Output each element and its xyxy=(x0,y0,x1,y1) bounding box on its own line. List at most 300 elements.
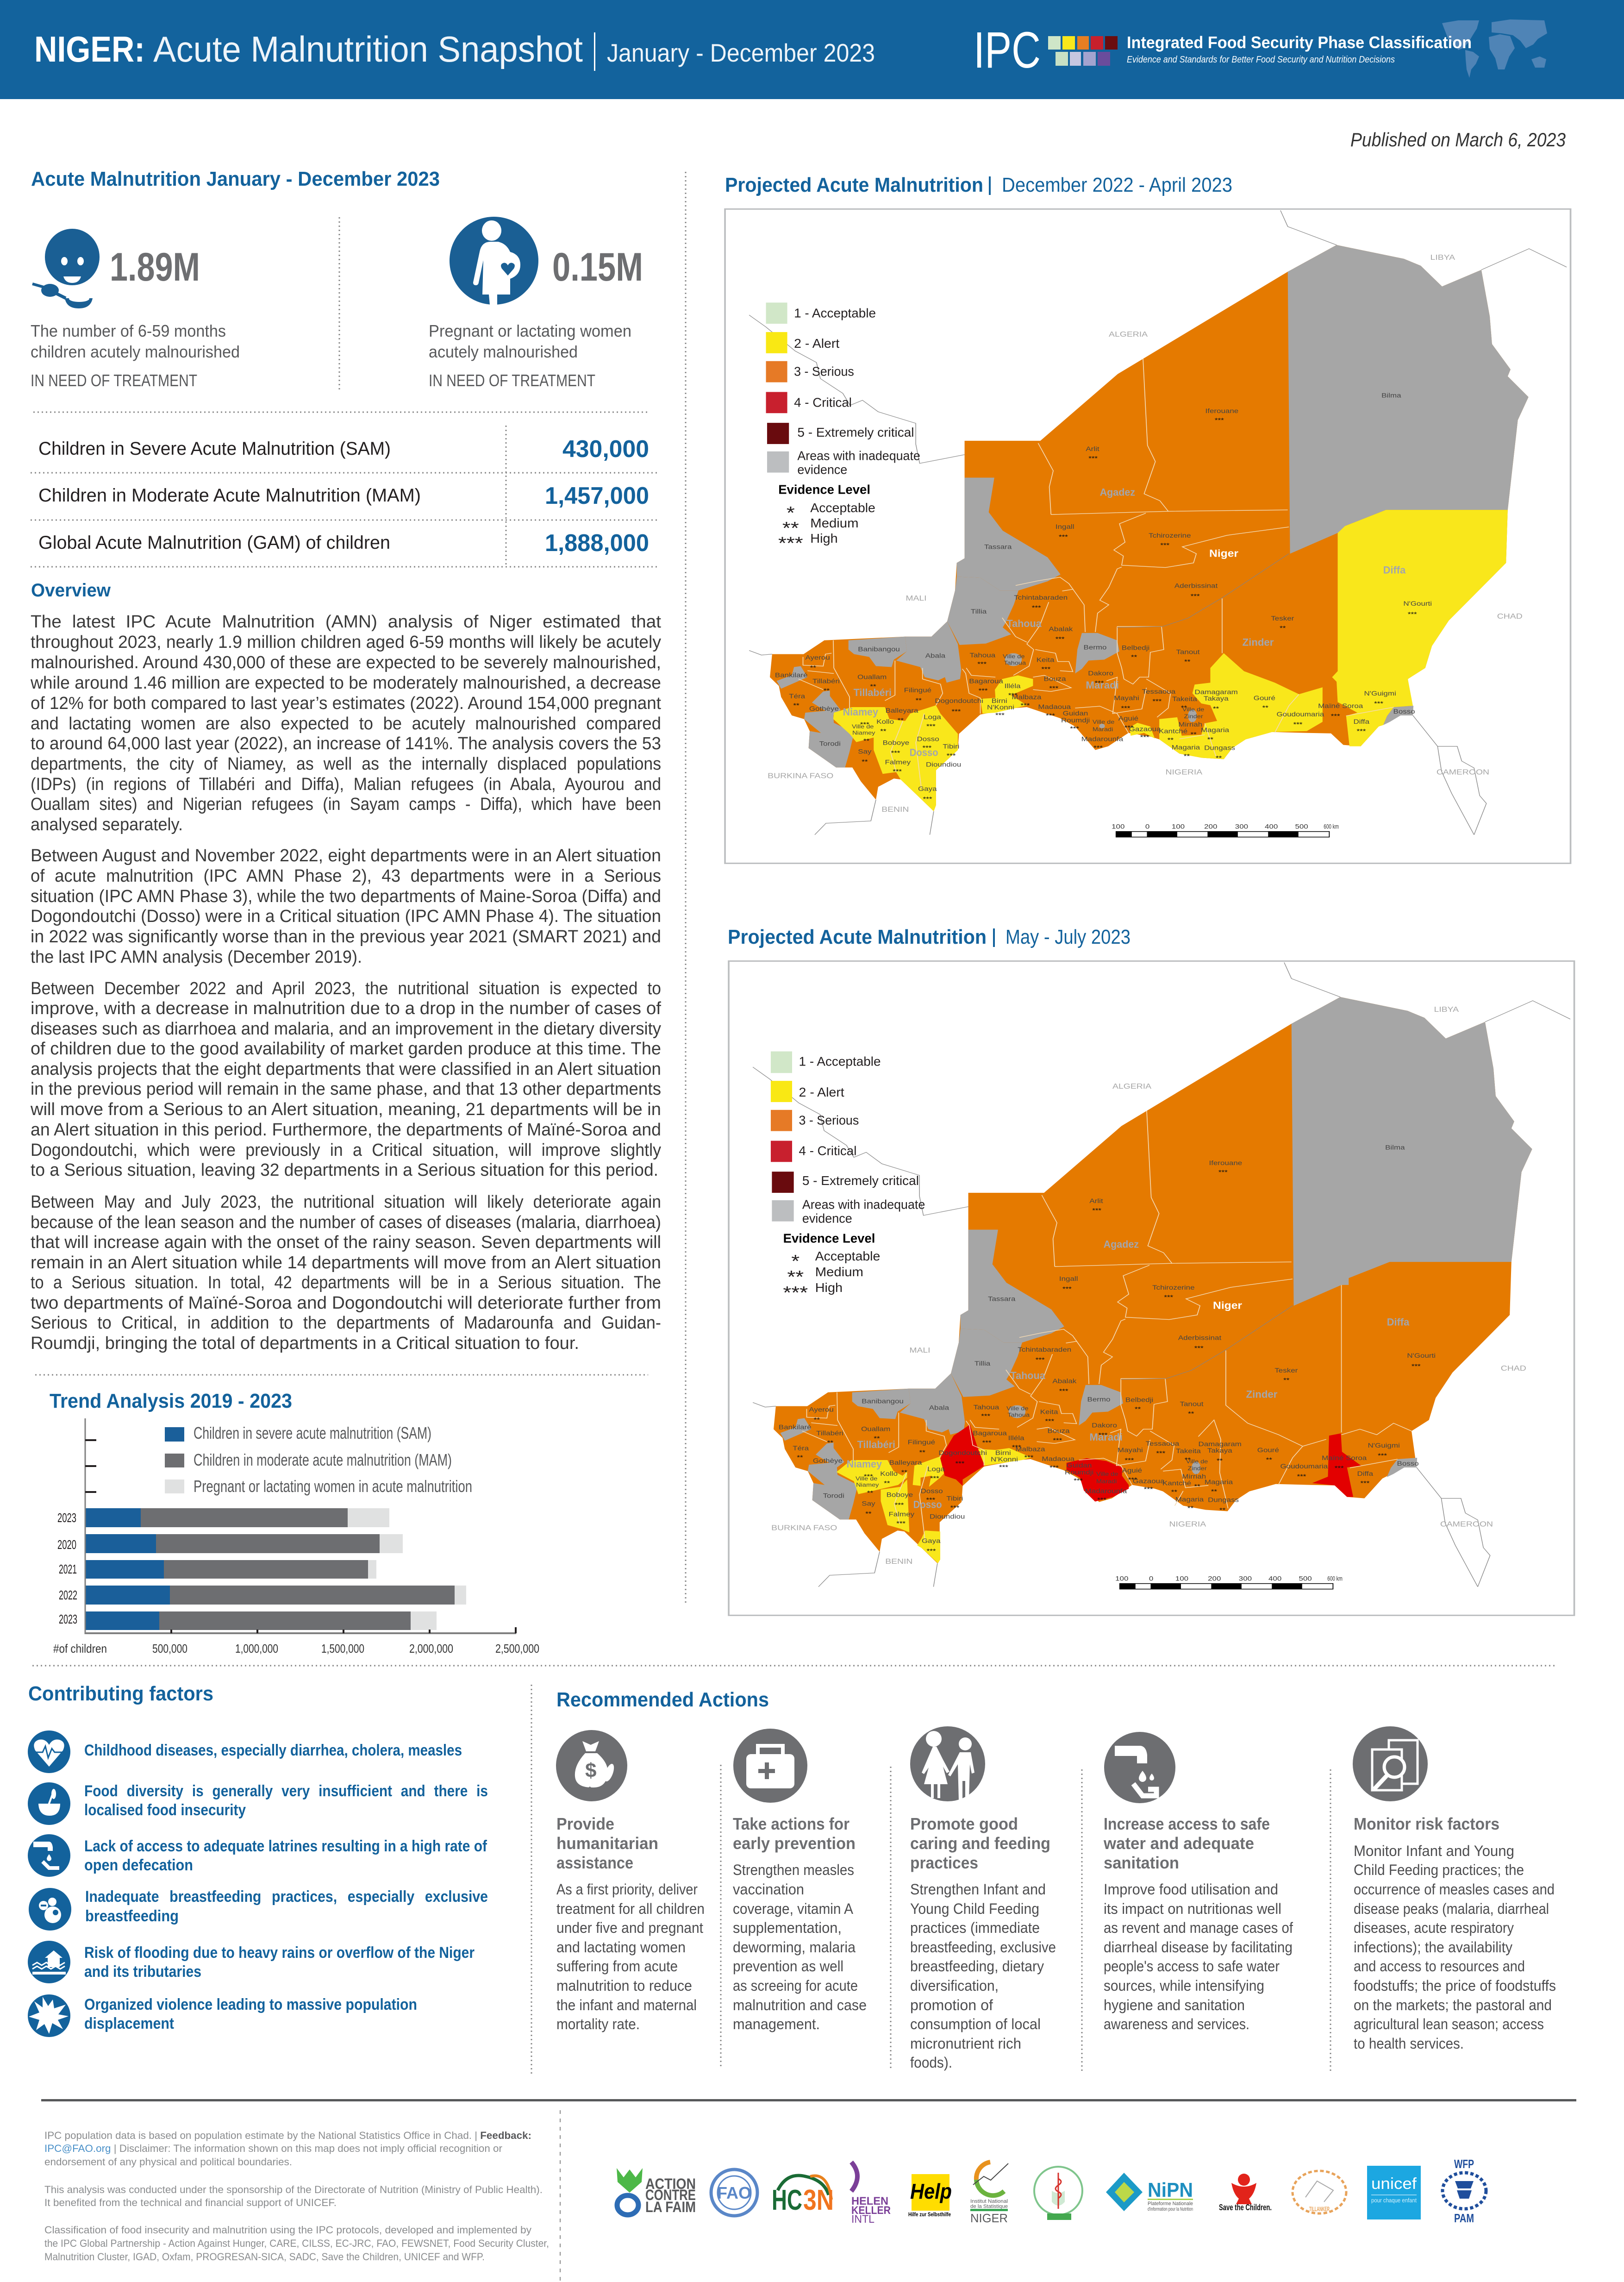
evidence level stars: *** xyxy=(995,712,1005,719)
scale bar: 100 xyxy=(1112,823,1125,830)
department labels and evidence stars: Say xyxy=(858,748,872,755)
factor 5 text xyxy=(84,1944,475,1981)
department labels: Gazaoua xyxy=(1133,1478,1165,1485)
action 5 text: agricultural lean season; access xyxy=(1354,2016,1544,2032)
action 5 text: Child Feeding practices; the xyxy=(1354,1862,1524,1878)
evidence level stars: *** xyxy=(1024,1454,1033,1461)
evidence level stars: ** xyxy=(1187,1505,1193,1512)
department labels and evidence stars: Arlit xyxy=(1086,445,1099,452)
logo: Helen Keller xyxy=(851,2162,891,2226)
evidence level stars: *** xyxy=(1041,666,1050,673)
scale bar: 400 xyxy=(1268,1575,1282,1582)
scale bar xyxy=(1112,823,1339,837)
factor 1 text: Childhood diseases, especially diarrhea, cholera, measles xyxy=(84,1742,462,1759)
department labels and evidence stars: Banibangou xyxy=(858,646,900,653)
heading: map 1: December 2022 - April 2023 xyxy=(1002,174,1232,196)
department labels and evidence stars: Ouallam xyxy=(857,674,887,681)
department labels: Tanout xyxy=(1180,1401,1204,1408)
department labels: Iferouane xyxy=(1209,1160,1242,1167)
department labels: Ville de xyxy=(1186,1458,1208,1465)
region labels: Dosso xyxy=(910,747,938,759)
text block: overview paragraph 4: Between May and July 2023, the nutritional situation will likely deteriorate again xyxy=(31,1192,661,1212)
factor 4 text: breastfeeding xyxy=(85,1907,179,1925)
action 2 text: deworming, malaria xyxy=(733,1939,856,1956)
phase 2 alert areas xyxy=(837,1448,1031,1563)
logo: health emblem xyxy=(1034,2167,1082,2220)
department labels: Tibiri xyxy=(946,1495,963,1502)
department labels and evidence stars: Maradi xyxy=(1093,726,1113,732)
text block: overview paragraph 4: to a Serious situation. In total, 42 departments will be in a Serious situation. The xyxy=(31,1273,661,1292)
department labels and evidence stars: Belbedji xyxy=(1122,645,1149,652)
country labels: BURKINA FASO xyxy=(768,771,833,780)
country labels: CHAD xyxy=(1501,1364,1526,1373)
evidence level stars: *** xyxy=(1036,1356,1045,1364)
evidence level stars: *** xyxy=(1125,1457,1134,1464)
department labels: Dogondoutchi xyxy=(938,1449,987,1457)
department labels and evidence stars: Filingué xyxy=(904,687,931,694)
panel: contributing factors xyxy=(28,1682,488,2037)
department labels: Bilma xyxy=(1385,1144,1405,1151)
action 1 text xyxy=(556,1814,705,2032)
department labels and evidence stars: Keita xyxy=(1037,657,1055,664)
department labels: Magaria xyxy=(1205,1479,1233,1486)
evidence level stars: *** xyxy=(1128,1476,1137,1483)
evidence level stars: *** xyxy=(1012,1444,1021,1451)
scale bar xyxy=(1115,1575,1343,1589)
action 4 text: hygiene and sanitation xyxy=(1104,1997,1245,2013)
evidence level stars: *** xyxy=(927,1548,936,1555)
evidence level stars: *** xyxy=(947,752,956,759)
Niger phase 3 base area xyxy=(770,245,1529,811)
department labels: Aguié xyxy=(1122,1467,1142,1474)
department labels and evidence stars xyxy=(775,392,1432,793)
evidence level stars: ** xyxy=(1190,731,1197,738)
department labels and evidence stars: Dioundiou xyxy=(926,761,961,768)
factor 4 text: Inadequate breastfeeding practices, especially exclusive xyxy=(85,1888,488,1906)
department labels: Ouallam xyxy=(861,1426,890,1433)
department labels and evidence stars: Aguié xyxy=(1118,715,1138,722)
action 3 text: practices (immediate xyxy=(910,1919,1040,1936)
evidence level stars: ** xyxy=(1266,1456,1272,1464)
region labels: Zinder xyxy=(1243,637,1274,648)
department labels: Tillia xyxy=(974,1360,991,1367)
factor 6 text: Organized violence leading to massive population xyxy=(84,1996,417,2013)
evidence level stars: ** xyxy=(884,1480,890,1487)
action 3 text: breastfeeding, exclusive xyxy=(910,1939,1056,1956)
action 2 text: malnutrition and case xyxy=(733,1997,867,2013)
evidence level stars: *** xyxy=(1046,712,1055,720)
text: children description: The number of 6-59 months xyxy=(31,321,226,340)
factor 2 text: localised food insecurity xyxy=(84,1801,246,1819)
text: children description: IN NEED OF TREATMENT xyxy=(31,371,197,390)
map legend: Evidence Level xyxy=(778,482,870,497)
department labels and evidence stars: Torodi xyxy=(819,740,841,747)
factor 5 text: Risk of flooding due to heavy rains or overflow of the Niger xyxy=(84,1944,475,1962)
department labels: Dungass xyxy=(1208,1497,1239,1504)
department labels and evidence stars: Takeita xyxy=(1172,696,1197,703)
factor 6 text: displacement xyxy=(84,2015,174,2032)
IPC colour bars xyxy=(1048,36,1118,66)
department labels: Madaoua xyxy=(1042,1455,1074,1463)
factor 2 text xyxy=(84,1782,488,1819)
logo: Helen Keller: KELLER xyxy=(851,2204,891,2217)
map legend: 5 - Extremely critical xyxy=(802,1173,919,1188)
map legend: Areas with inadequate xyxy=(797,449,920,463)
heading: map 1 xyxy=(725,174,1232,196)
evidence level stars: ** xyxy=(1219,1507,1225,1514)
logo: Institut National de la Statistique Niger xyxy=(970,2162,1008,2225)
action 2 text: as screeing for acute xyxy=(733,1977,858,1994)
evidence level stars: *** xyxy=(1335,1465,1344,1472)
evidence level stars: *** xyxy=(1121,705,1130,712)
action 5 text: Monitor Infant and Young xyxy=(1354,1843,1514,1859)
table: SAM MAM GAM xyxy=(31,426,657,567)
table: SAM MAM GAM: 1,457,000 xyxy=(545,483,649,509)
region labels: Agadez xyxy=(1100,487,1135,498)
evidence level stars: ** xyxy=(1207,736,1213,743)
department labels: Banibangou xyxy=(862,1398,904,1405)
icon: child eating xyxy=(32,229,100,308)
logo: UNICEF: unicef xyxy=(1371,2175,1417,2193)
action 2 text xyxy=(733,1814,867,2032)
text block: overview paragraph 1 xyxy=(30,612,661,834)
text block: overview paragraph 1: malnourished. Around 430,000 of these are expected to be severely malnourished, xyxy=(31,653,661,672)
text block: overview paragraph 3: will move from a Serious to an Alert situation, meaning, 21 departments will be in xyxy=(30,1100,661,1119)
table: SAM MAM GAM: 1,888,000 xyxy=(545,530,649,557)
department labels: Dioundiou xyxy=(930,1513,965,1520)
department labels: Diffa xyxy=(1357,1470,1373,1477)
evidence level stars: *** xyxy=(1152,698,1162,705)
scale bar: 600 km xyxy=(1324,823,1339,830)
region labels xyxy=(843,487,1406,759)
department labels and evidence stars: Takaya xyxy=(1204,695,1229,702)
text block: overview paragraph 1: throughout 2023, nearly 1.9 million children aged 6-59 months will likely be acutely xyxy=(31,633,661,652)
text block: overview paragraph 3: Between December 2022 and April 2023, the nutritional situation is expected to xyxy=(31,979,661,998)
map legend: Medium xyxy=(810,516,859,530)
evidence level stars: ** xyxy=(1135,1406,1141,1413)
department borders xyxy=(802,1111,1412,1541)
evidence level stars: *** xyxy=(1164,1294,1173,1301)
evidence level stars: ** xyxy=(1171,1489,1177,1496)
evidence level stars: *** xyxy=(1059,533,1068,540)
department labels and evidence stars: Madarounfa xyxy=(1081,736,1124,743)
department labels and evidence stars: Ville de xyxy=(1003,653,1024,659)
action 2 text: management. xyxy=(733,2016,820,2032)
action 1 text: under five and pregnant xyxy=(556,1919,703,1936)
evidence level stars: ** xyxy=(827,1440,833,1447)
department labels and evidence stars: Dungass xyxy=(1204,745,1235,752)
department labels and evidence stars: Abala xyxy=(925,652,946,659)
department labels and evidence stars: Tahoua xyxy=(969,652,996,659)
action 3 text: diversification, xyxy=(910,1977,999,1994)
department labels: Ayerou xyxy=(809,1406,834,1413)
department labels: Magaria xyxy=(1175,1496,1204,1503)
evidence level stars: ** xyxy=(793,702,800,709)
footer disclaimer text: the IPC Global Partnership - Action Against Hunger, CARE, CILSS, EC-JRC, FAO, FEWSNET, Food Security Cluster, xyxy=(44,2238,549,2249)
logo: Institut National de la Statistique Niger: NIGER xyxy=(970,2211,1008,2225)
action 4 text: sanitation xyxy=(1104,1853,1179,1872)
text block: overview paragraph 1: while around 1.46 million are expected to be moderately malnourished, a decrease xyxy=(30,673,661,693)
evidence level stars: *** xyxy=(1124,724,1134,731)
logo: Save the Children xyxy=(1219,2174,1272,2212)
text block: overview paragraph 2 xyxy=(31,846,661,967)
map legend: *** xyxy=(778,533,803,553)
IPC full name: Integrated Food Security Phase Classification xyxy=(1127,33,1472,52)
evidence level stars: *** xyxy=(1093,745,1103,752)
region labels: Diffa xyxy=(1383,565,1406,576)
evidence level stars: *** xyxy=(1378,1452,1387,1460)
map legend: 2 - Alert xyxy=(799,1085,844,1099)
department labels: Bosso xyxy=(1397,1460,1419,1467)
evidence level stars: *** xyxy=(1331,713,1340,720)
evidence level stars: *** xyxy=(1008,692,1018,699)
department labels: Tassara xyxy=(988,1296,1016,1303)
chart year labels: 2020 xyxy=(57,1537,76,1552)
map legend: evidence xyxy=(797,462,847,477)
map panel: December 2022 - April 2023 xyxy=(725,209,1571,863)
evidence level stars: *** xyxy=(1218,1169,1228,1176)
chart axis labels: 2,500,000 xyxy=(495,1642,539,1655)
text: children description: children acutely malnourished xyxy=(31,342,240,361)
department labels: Belbedji xyxy=(1125,1397,1153,1404)
scale bar: 0 xyxy=(1149,1575,1154,1582)
evidence level stars: ** xyxy=(1216,755,1222,762)
department labels and evidence stars: Roumdji xyxy=(1061,717,1090,724)
world map decoration xyxy=(1442,19,1547,78)
evidence level stars: ** xyxy=(1211,1488,1217,1495)
scale bar: 300 xyxy=(1235,823,1248,830)
country labels: LIBYA xyxy=(1434,1005,1459,1013)
department labels and evidence stars: Tessaoua xyxy=(1142,689,1176,696)
heading: trend analysis: Trend Analysis 2019 - 2023 xyxy=(50,1390,292,1412)
department labels and evidence stars: Tillia xyxy=(971,608,987,615)
icon: medical kit xyxy=(733,1729,807,1803)
evidence level stars: *** xyxy=(1144,1486,1153,1493)
factor 3 text xyxy=(84,1837,487,1874)
map legend: evidence xyxy=(802,1211,852,1226)
text block: overview paragraph 2: in 2022 was significantly worse than in the previous year 2021 (SMART 2021) and xyxy=(31,927,661,947)
logo: HC3N: HC xyxy=(772,2184,802,2216)
department labels and evidence stars: Madaoua xyxy=(1038,703,1071,711)
evidence level stars: ** xyxy=(1184,753,1190,760)
phase 4 critical areas xyxy=(940,1424,1361,1502)
department labels: Mayahi xyxy=(1118,1447,1143,1454)
scale bar: 100 xyxy=(1115,1575,1129,1582)
evidence level stars: *** xyxy=(1070,725,1079,732)
scale bar: 100 xyxy=(1175,1575,1189,1582)
evidence level stars: *** xyxy=(1053,1437,1062,1444)
stat: children: 1.89M xyxy=(110,245,200,289)
table: SAM MAM GAM: Children in Severe Acute Malnutrition (SAM) xyxy=(38,439,391,459)
evidence level stars: ** xyxy=(1217,1457,1223,1465)
action 2 text: Strengthen measles xyxy=(733,1862,854,1878)
department labels and evidence stars: Mirriah xyxy=(1178,721,1202,728)
region labels: Zinder xyxy=(1246,1389,1278,1400)
department labels: Kantché xyxy=(1162,1480,1191,1487)
footer disclaimer text: IPC population data is based on population estimate by the National Statistics Office in Chad. | Feedback: xyxy=(44,2130,531,2141)
department labels: Damagaram xyxy=(1199,1441,1242,1448)
department labels and evidence stars: Aderbissinat xyxy=(1174,583,1218,589)
evidence level stars: ** xyxy=(1184,658,1190,665)
country labels: CAMEROON xyxy=(1440,1520,1493,1528)
heading: map 2 xyxy=(728,926,1131,948)
logo: NiPN: NiPN xyxy=(1148,2179,1193,2201)
text block: overview paragraph 3: in the previous period will remain in the same phase, and that 13 other departments xyxy=(31,1079,661,1099)
logo: Action Contre la Faim: ACTION xyxy=(645,2175,696,2192)
evidence level stars: ** xyxy=(1262,704,1268,712)
action 4 text: awareness and services. xyxy=(1104,2016,1249,2032)
panel: acute malnutrition key figures xyxy=(31,168,657,567)
action 3 text: Promote good xyxy=(910,1814,1018,1833)
evidence level stars: ** xyxy=(1168,737,1174,744)
map legend: Medium xyxy=(815,1265,863,1279)
map legend: 4 - Critical xyxy=(799,1143,856,1158)
IPC logo wordmark: IPC xyxy=(974,22,1041,79)
action 1 text: humanitarian xyxy=(556,1834,658,1853)
action 4 text: diarrheal disease by facilitating xyxy=(1104,1939,1293,1956)
department labels: Falmey xyxy=(888,1511,914,1518)
action 5 text: and access to resources and xyxy=(1354,1958,1525,1975)
department labels and evidence stars: Tchintabaraden xyxy=(1014,595,1068,602)
evidence level stars: *** xyxy=(926,1497,935,1504)
action 1 text: the infant and maternal xyxy=(556,1997,697,2013)
stat: women: 0.15M xyxy=(552,245,643,289)
region labels: Dosso xyxy=(913,1499,942,1511)
evidence level stars: *** xyxy=(860,721,869,728)
department labels and evidence stars: Guidan xyxy=(1063,710,1088,717)
evidence level stars: ** xyxy=(797,1454,803,1461)
department labels and evidence stars: Tibiri xyxy=(943,743,959,750)
evidence level stars: *** xyxy=(1374,700,1383,708)
department labels: Tessaoua xyxy=(1146,1441,1180,1448)
department labels: N'Guigmi xyxy=(1368,1442,1400,1449)
panel: recommended actions xyxy=(556,1688,1556,2073)
evidence level stars: *** xyxy=(864,1473,873,1480)
icon: explosion xyxy=(28,1994,70,2037)
logo: Action Contre la Faim xyxy=(617,2168,696,2215)
evidence level stars: ** xyxy=(880,728,886,735)
map legend xyxy=(771,1051,925,1302)
action 4 text: people's access to safe water xyxy=(1104,1958,1280,1975)
text block: overview paragraph 4: Serious to Critical, in addition to the departments of Madarounfa and Guidan- xyxy=(31,1313,661,1333)
department labels and evidence stars: Malbaza xyxy=(1012,694,1042,701)
map legend: 1 - Acceptable xyxy=(794,306,876,320)
evidence level stars: ** xyxy=(1181,704,1187,712)
region labels: Tillabéri xyxy=(857,1439,895,1451)
text block: overview paragraph 3: improve, with a decrease in malnutrition due to a drop in the number of cases of xyxy=(31,999,661,1018)
department labels: Téra xyxy=(793,1445,809,1452)
country name on map: Niger xyxy=(1213,1300,1243,1311)
department labels and evidence stars: Abalak xyxy=(1049,626,1073,633)
factor 5 text: and its tributaries xyxy=(84,1963,201,1981)
evidence level stars: *** xyxy=(1191,593,1200,600)
action 3 text: Young Child Feeding xyxy=(910,1900,1039,1917)
logo: Helen Keller: INTL xyxy=(851,2213,874,2226)
title: period: January - December 2023 xyxy=(607,38,875,67)
map legend: Areas with inadequate xyxy=(802,1197,925,1212)
department labels: Illéla xyxy=(1008,1435,1024,1442)
factor 3 text: open defecation xyxy=(84,1856,193,1874)
department labels: Tesker xyxy=(1274,1367,1298,1374)
department labels: Tillabéri xyxy=(816,1430,843,1437)
evidence level stars: *** xyxy=(1156,1450,1165,1457)
department labels: Say xyxy=(862,1500,875,1507)
map legend: 1 - Acceptable xyxy=(799,1054,881,1069)
evidence level stars: ** xyxy=(1280,625,1286,632)
department labels: Tchirozerine xyxy=(1152,1284,1195,1291)
logo: Institut National de la Statistique Niger: Institut National xyxy=(970,2199,1008,2204)
footer disclaimer text xyxy=(44,2130,549,2263)
map legend: Evidence Level xyxy=(783,1231,875,1246)
department labels and evidence stars: Birni xyxy=(992,697,1007,705)
action 1 text: treatment for all children xyxy=(556,1900,705,1917)
evidence level stars: *** xyxy=(1361,1480,1369,1487)
department labels: Mirriah xyxy=(1182,1473,1206,1480)
department labels and evidence stars: Falmey xyxy=(885,759,911,766)
action 3 text xyxy=(910,1814,1056,2071)
department labels xyxy=(779,1144,1436,1545)
department labels and evidence stars: Kollo xyxy=(876,718,894,725)
action 3 text: consumption of local xyxy=(910,2016,1041,2032)
evidence level stars: ** xyxy=(867,1490,873,1497)
evidence level stars: ** xyxy=(865,1511,871,1517)
action 1 text: Provide xyxy=(556,1814,614,1833)
department labels: Madarounfa xyxy=(1085,1488,1127,1495)
department labels and evidence stars: Diffa xyxy=(1354,718,1369,725)
department labels: Niamey xyxy=(856,1482,879,1488)
department labels and evidence stars: Dakoro xyxy=(1088,670,1113,677)
department labels and evidence stars: Loga xyxy=(924,714,941,721)
department labels: Torodi xyxy=(823,1492,844,1499)
text block: overview paragraph 3: of children due to the good availability of market garden produce at this time. The xyxy=(31,1039,661,1059)
department labels and evidence stars: Magaria xyxy=(1172,744,1200,751)
heading: contributing factors: Contributing factors xyxy=(28,1682,213,1705)
department labels and evidence stars: Balleyara xyxy=(886,707,918,715)
Niger phase 3 base area xyxy=(774,997,1532,1563)
action 5 text xyxy=(1354,1814,1556,2052)
evidence level stars: *** xyxy=(1160,542,1169,549)
department labels and evidence stars: Téra xyxy=(789,693,806,700)
icon: money bag and wheat xyxy=(556,1730,627,1801)
department labels: Dosso xyxy=(921,1488,943,1495)
action 3 text: caring and feeding xyxy=(910,1834,1050,1853)
logo: FAO xyxy=(711,2169,757,2216)
department labels and evidence stars: Tassara xyxy=(984,544,1012,551)
department labels and evidence stars: Bosso xyxy=(1393,708,1415,715)
text block: overview paragraph 1: Ouallam sites) and Nigerian refugees (in Sayam camps - Diffa), which have been xyxy=(31,795,661,814)
text block: overview paragraph 1: departments, the city of Niamey, as well as the internally displaced populations xyxy=(31,754,661,774)
icon: money bag and wheat: $ xyxy=(585,1759,596,1782)
evidence level stars: *** xyxy=(1099,1432,1107,1439)
action 1 text: assistance xyxy=(556,1853,633,1872)
evidence level stars: *** xyxy=(1045,1418,1054,1425)
department labels: Ingall xyxy=(1059,1275,1078,1283)
map legend: 3 - Serious xyxy=(799,1113,859,1128)
areas with inadequate evidence xyxy=(777,245,1529,767)
text: women description xyxy=(429,321,631,390)
text block: overview paragraph 2: Dogondoutchi (Dosso) were in a Critical situation (IPC AMN Phase 4). The situation xyxy=(31,907,661,926)
evidence level stars: ** xyxy=(919,1449,925,1456)
map legend: 5 - Extremely critical xyxy=(797,425,914,439)
centre vertical divider xyxy=(685,172,686,1605)
department labels and evidence stars: Tchirozerine xyxy=(1149,532,1191,539)
region labels: Agadez xyxy=(1104,1239,1139,1250)
chart year labels xyxy=(57,1511,77,1626)
evidence level stars: *** xyxy=(999,1464,1008,1471)
department labels: Gouré xyxy=(1257,1447,1279,1454)
logo: Save the Children: Save the Children. xyxy=(1219,2203,1272,2212)
evidence level stars: ** xyxy=(1185,1456,1191,1464)
